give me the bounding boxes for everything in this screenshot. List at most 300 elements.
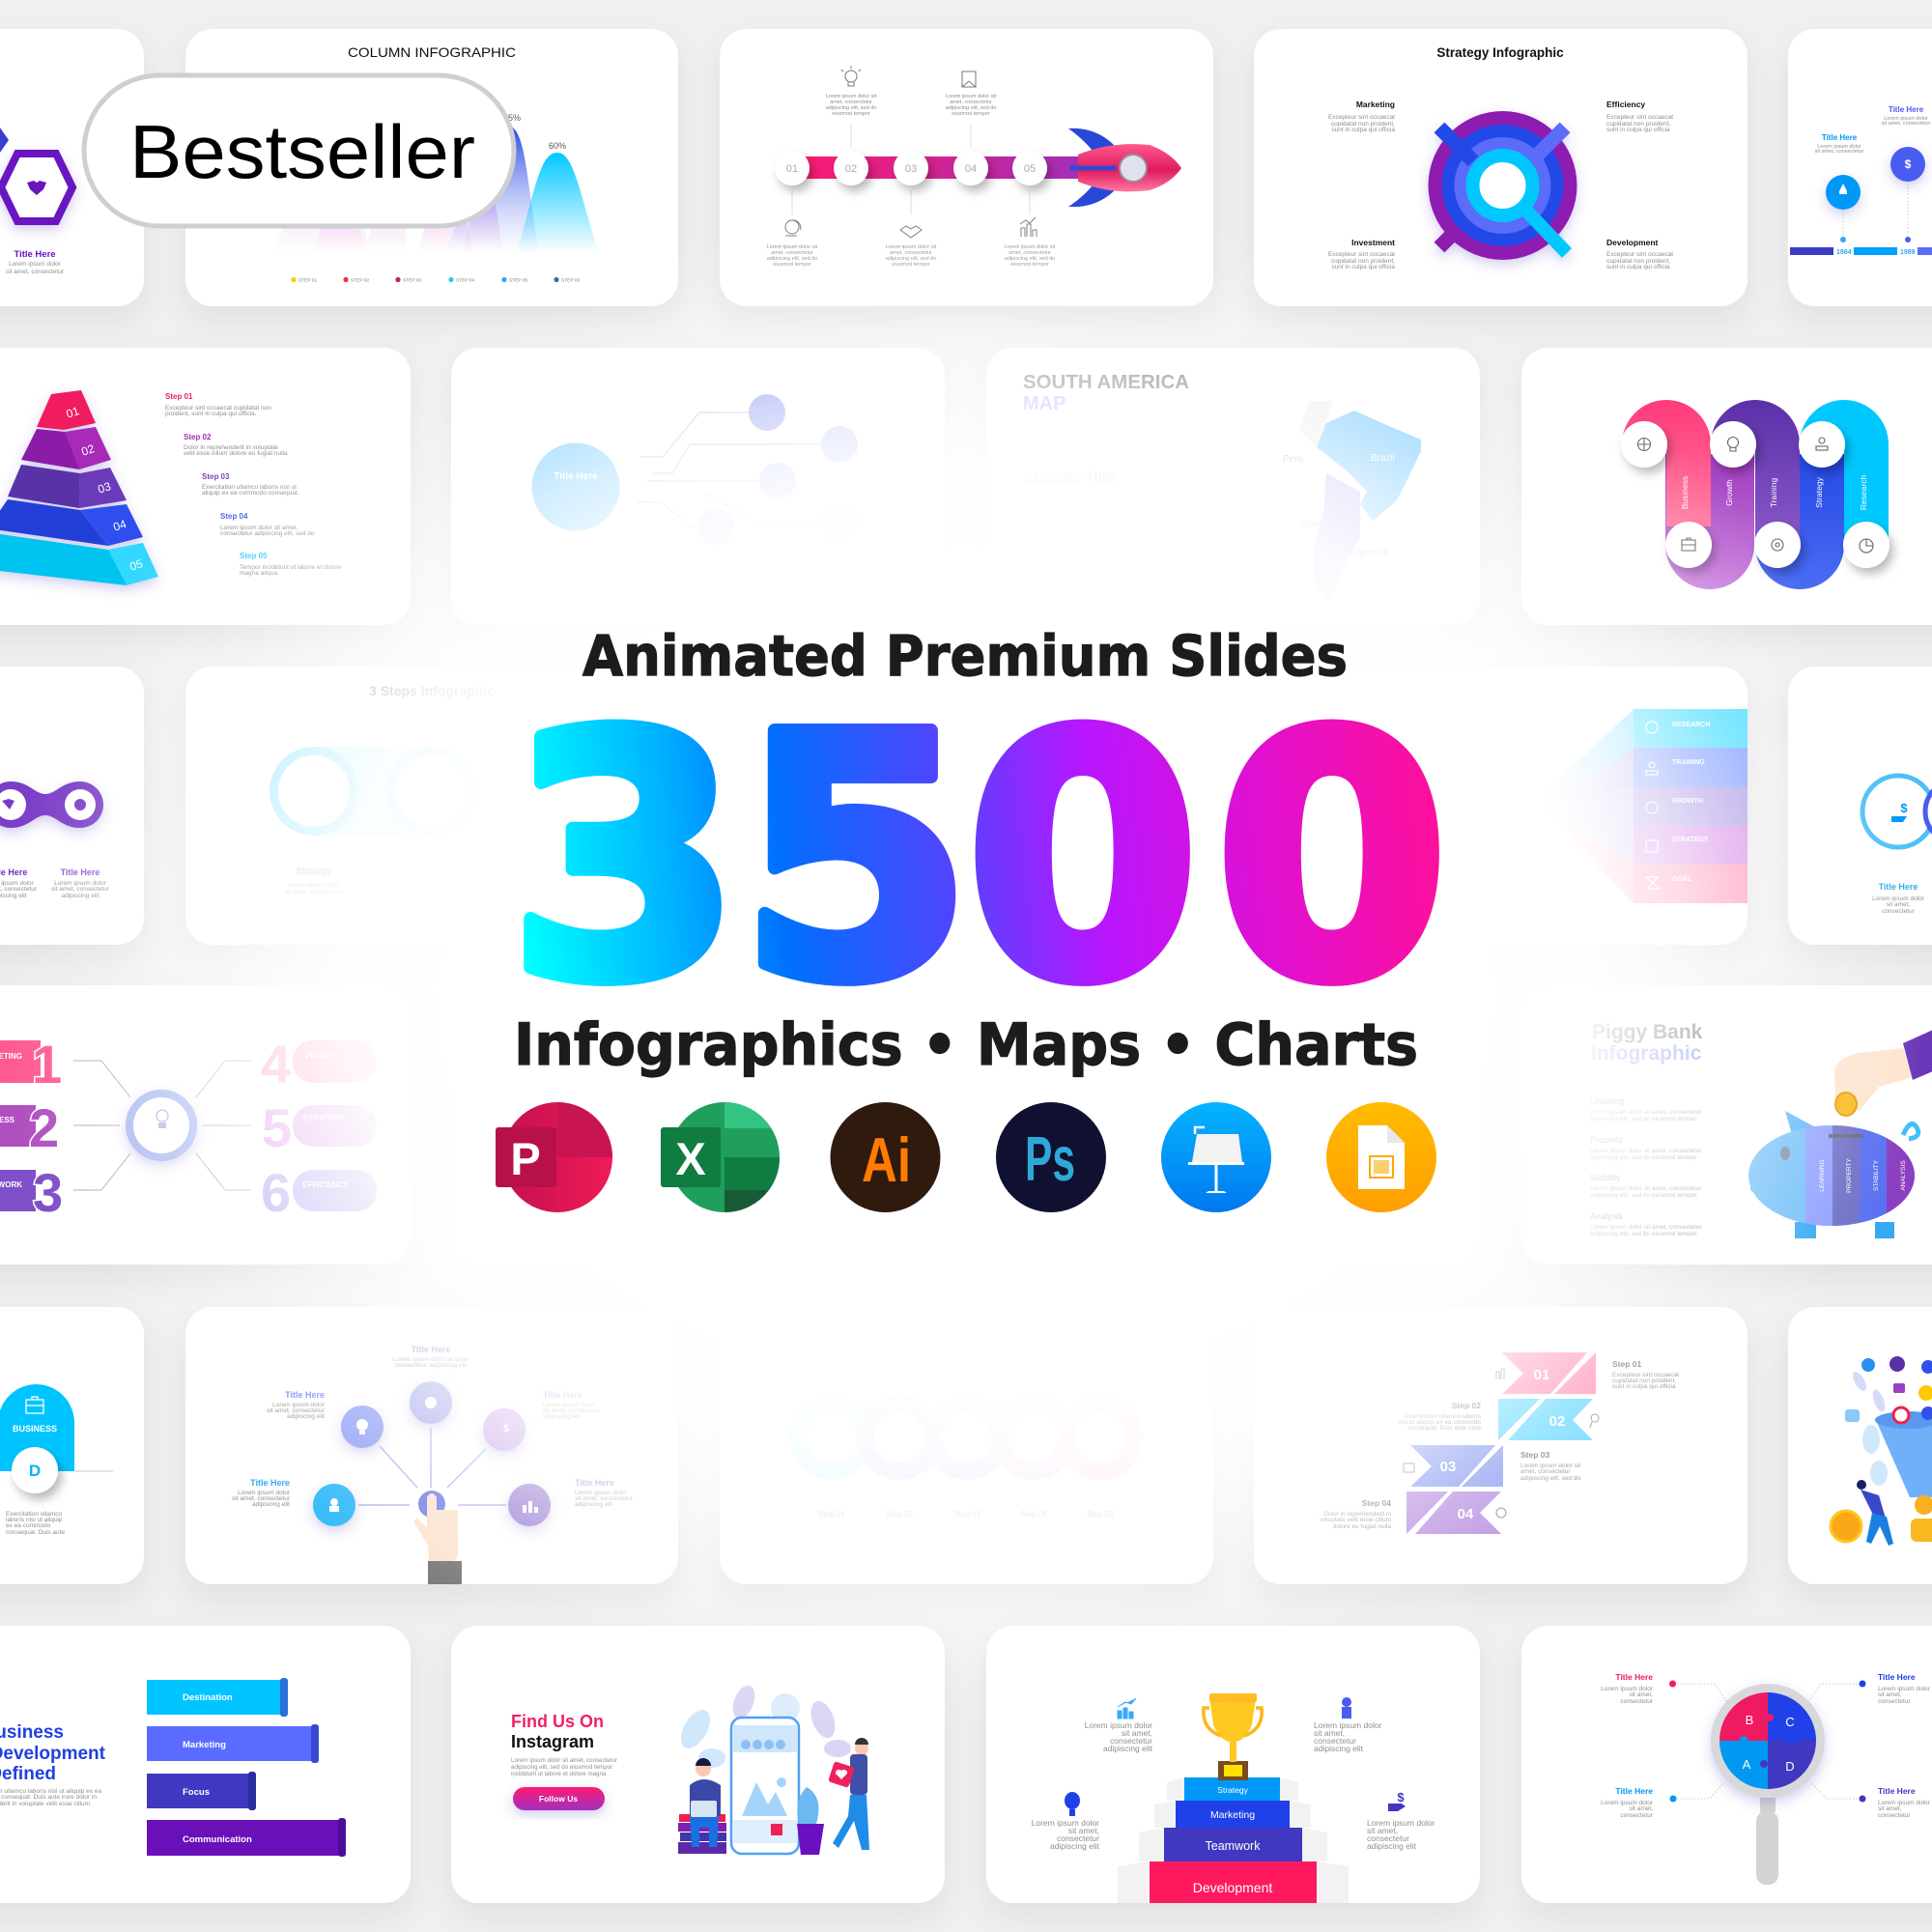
timeline markers: $ [1905,157,1912,171]
side captions [1032,1720,1435,1851]
hand [413,1493,462,1584]
button [513,1787,605,1810]
heading [511,1712,604,1751]
panel: strategy infographic [1254,29,1747,306]
list text [1590,1109,1702,1237]
step captions: Step 03 [953,1510,980,1519]
piggy labels: PROPERTY [1846,1158,1853,1193]
chevron numbers: 02 [1549,1413,1565,1430]
puzzle letters [1743,1713,1795,1774]
step captions: amet, consectetur [950,99,992,105]
pyramid [0,390,158,585]
ribbon: research [1800,400,1889,545]
button: Follow Us [539,1794,578,1804]
step captions: Step 04 [220,512,248,521]
hidden companion slide [986,985,1480,1264]
side captions: Lorem ipsum dolor [1367,1818,1435,1828]
icon: Excel [661,1102,780,1212]
stacked bands [1634,709,1747,903]
step numbers: 01 [65,404,81,421]
step captions: adipiscing elit, sed do [886,256,936,262]
band labels [1672,722,1710,883]
node captions: adipiscing elit [543,1413,581,1420]
step captions: Step 05 [240,552,268,560]
magnifier rim [1711,1684,1825,1798]
node captions: sit amet, consectetur [575,1495,634,1502]
panel: hexagon slide [0,29,144,306]
body text: Lorem ipsum dolor sit amet, consectetur [511,1757,617,1764]
step captions: Dolor in reprehenderit in [1323,1511,1391,1518]
callouts: consectetur [1878,1812,1911,1819]
caption: sit amet, [1887,901,1910,908]
chain graphic [0,781,103,828]
side captions: Lorem ipsum dolor [1032,1818,1099,1828]
quadrant labels: sunt in culpa qui officia [1331,264,1395,270]
piggy illustration [1748,1111,1918,1238]
heading: Strategy Infographic [1436,45,1564,60]
magnifier handle [1756,1797,1778,1885]
timeline bar [792,156,1111,179]
quadrant labels: Excepteur sint occaecat [1328,114,1395,121]
value labels: 60% [549,141,566,151]
node captions: Lorem ipsum dolor [238,1490,291,1496]
panel: five rings [720,1307,1213,1584]
step captions: eiusmod tempor [773,262,811,268]
ribbon labels: Research [1859,475,1868,510]
chevrons [1406,1352,1596,1534]
quadrant labels: cupidatat non proident, [1331,121,1395,128]
callouts: consectetur [1620,1698,1654,1705]
legend: STEP 04 [456,278,474,284]
step captions: Lorem ipsum dolor sit [1005,244,1056,250]
map labels: Argentina [1348,548,1389,558]
step captions: aliquip ex ea commodo consequat. [202,490,299,497]
puzzle letters: C [1785,1715,1795,1729]
step captions: velit esse cillum dolore eu fugiat nulla [184,450,288,457]
step captions: Step 04 [1362,1498,1391,1508]
icon: handshake [27,181,46,195]
icon: Google Slides [1326,1102,1436,1212]
list: Analysis [1590,1211,1623,1221]
panel: wave ribbons [1521,348,1932,625]
illustration: standing man [828,1738,869,1850]
timeline nodes: 01 [786,163,798,175]
value labels [503,113,566,151]
slide caption: Title Here [14,249,56,260]
panel: megaphone [1788,1307,1932,1584]
list text: adipiscing elit, sed do eiusmod tempor [1590,1116,1697,1122]
step captions: eiusmod tempor [832,111,870,117]
left bands [0,1040,41,1211]
chevron numbers: 03 [1440,1459,1456,1475]
step captions: Step 01 [818,1510,845,1519]
callouts: Lorem ipsum dolor [1601,1686,1654,1692]
callouts [1601,1672,1931,1819]
piggy labels: LEARNING [1819,1159,1826,1192]
step captions: adipiscing elit, sed do [826,105,876,111]
fan bottom [1546,811,1634,903]
timeline bars [1790,247,1932,256]
side captions: consectetur [1314,1736,1356,1746]
grey stairs [1118,1777,1349,1903]
list text: adipiscing elit, sed do eiusmod tempor [1590,1192,1697,1199]
list text: adipiscing elit, sed do eiusmod tempor [1590,1154,1697,1161]
timeline bars: 1989 [1900,249,1916,256]
hub circle [531,442,620,531]
captions: sit amet, consectetur [1882,121,1931,127]
nodes [697,394,858,545]
target graphic [1428,111,1577,260]
linked rings [274,747,471,836]
quadrant labels: Excepteur sint occaecat [1328,251,1395,258]
captions: Title Here [1889,105,1924,114]
step captions: Lorem ipsum dolor sit [946,94,997,99]
panel: trophy steps [986,1626,1480,1903]
heading: MAP [1023,393,1065,414]
icon: Excel: X [675,1133,706,1184]
node captions: Lorem ipsum dolor [575,1490,628,1496]
node captions: consectetur adipiscing elit [395,1362,467,1369]
side captions: sit amet, [1314,1728,1345,1738]
panel: ring slide [1788,667,1932,945]
leaves [1850,1370,1888,1486]
heading [1591,1021,1703,1065]
step captions: eiusmod tempor [1010,262,1049,268]
node captions: Lorem ipsum dolor sit amet [393,1356,469,1363]
captions: sit amet, consectetur [1815,149,1864,155]
coin and hand [1834,1026,1932,1116]
slide caption: Lorem ipsum dolor [9,261,62,268]
side captions: sit amet, [1068,1826,1099,1835]
puzzle letters: D [1785,1759,1795,1774]
panel: piggy bank [1590,985,1932,1277]
caption [1872,882,1925,915]
trophy [1204,1693,1262,1780]
band icons [1646,722,1660,889]
map labels [1283,453,1395,558]
node captions: adipiscing elit [287,1413,325,1420]
stair labels: Development [1193,1880,1272,1895]
node captions: sit amet, consectetur [267,1407,326,1414]
side captions: consectetur [1057,1833,1099,1843]
letter ball: D [29,1462,41,1480]
ribbon: growth [1665,454,1754,589]
ribbon labels: Marketing [183,1740,226,1750]
step captions: consequat. Duis aute irure [1407,1425,1481,1432]
panel: timeline slide [1788,29,1932,306]
chevron numbers: 01 [1534,1367,1549,1383]
coins [1831,1495,1932,1542]
callouts: Lorem ipsum dolor [1878,1686,1931,1692]
panel: dumbbell slide [0,667,144,945]
fan lower middle [1546,787,1634,865]
step captions: adipiscing elit, sed do [767,256,817,262]
legend: STEP 01 [298,278,317,284]
panel: 3 steps infographic [185,667,678,945]
step captions: Lorem ipsum dolor sit [767,244,818,250]
ribbon labels: Strategy [1814,476,1824,508]
node captions: sit amet, consectetur [232,1495,291,1502]
band labels: TRAINING [1672,759,1705,766]
right labels [302,1052,349,1189]
captions: Title Here [61,867,99,877]
panel: business development [0,1626,411,1903]
caption: Title Here [1879,882,1918,892]
callouts: sit amet, [1629,1805,1653,1812]
node captions: sit amet, consectetur [543,1407,602,1414]
left labels [0,1052,22,1189]
list: Learning [1590,1096,1624,1106]
statistic title: Statistic Title [1023,469,1115,487]
body text: incididunt ut labore et dolore magna [511,1771,607,1777]
step captions: Lorem ipsum dolor sit [886,244,937,250]
icons [1065,1697,1406,1816]
step captions [818,1510,1114,1519]
step captions: proident, sunt in culpa qui officia. [165,411,257,417]
step numbers: 02 [79,441,97,459]
decorative connectors [792,124,1030,214]
piggy labels [1819,1158,1907,1193]
slide caption [6,249,65,275]
step captions: voluptate velit esse cillum [1320,1517,1391,1523]
side captions: adipiscing elit [1367,1841,1417,1851]
node icons [329,1397,538,1513]
side captions: sit amet, [1122,1728,1152,1738]
quadrant labels: Excepteur sint occaecat [1606,114,1673,121]
step captions: Step 02 [886,1510,913,1519]
panel: hidden centre slide [720,667,1213,945]
icon: Illustrator [831,1102,941,1212]
step captions: nisi ut aliquip ex ea commodo [1398,1419,1481,1426]
side captions: adipiscing elit [1050,1841,1100,1851]
step captions: Step 04 [1020,1510,1047,1519]
legend: STEP 06 [561,278,580,284]
callouts: sit amet, [1878,1691,1902,1698]
node captions: Lorem ipsum dolor [272,1402,326,1408]
step captions: adipiscing elit, sed do [1520,1475,1581,1482]
step captions: dolore eu fugiat nulla [1333,1523,1391,1530]
heading: 3 Steps Infographic [369,683,495,698]
timeline nodes: 03 [905,163,917,175]
body text [6,1511,65,1536]
chevron icons [1404,1369,1599,1518]
ribbon labels: Destination [183,1692,233,1703]
icon: briefcase [26,1397,43,1413]
person [1857,1480,1893,1546]
ribbon labels: Training [1769,478,1778,507]
step captions: cupidatat non proident, [1612,1378,1676,1384]
band labels: GOAL [1672,876,1692,883]
left numerals: 1 [32,1034,62,1094]
piggy labels: ANALYSIS [1900,1160,1907,1191]
step captions: Step 03 [202,472,230,481]
quadrant labels: Development [1606,238,1659,247]
step captions: Lorem ipsum dolor sit [826,94,877,99]
node captions: Title Here [575,1478,614,1488]
slide caption: sit amet, consectetur [6,269,65,275]
illustration: phone [731,1718,799,1854]
legend [291,277,580,284]
right labels: STRATEGY [303,1114,346,1122]
puzzle letters: B [1746,1713,1753,1727]
quadrant labels: Marketing [1356,99,1395,109]
caption: Strategy [296,867,332,877]
ring [1862,776,1932,847]
right numerals [261,1034,292,1223]
left numerals: 2 [29,1097,59,1158]
step captions [1320,1359,1679,1530]
callouts: sit amet, [1629,1691,1653,1698]
captions: Lorem ipsum dolor [1817,144,1861,150]
dotted connectors [1677,1684,1858,1799]
panel: funnel bands [1254,667,1747,945]
step captions: amet, consectetur [890,250,932,256]
step numbers: 03 [96,479,113,497]
step captions: magna aliqua. [240,570,279,577]
ribbon nodes [1621,421,1889,568]
step captions: Step 01 [165,392,193,401]
step captions: Lorem ipsum dolor sit [1520,1463,1580,1469]
subtitle: Infographics • Maps • Charts [514,1011,1418,1079]
caption: Lorem ipsum dolor [1872,895,1925,902]
ribbon: strategy [1755,454,1844,589]
illustration: plants [675,1683,851,1768]
timeline bars: 1984 [1836,249,1852,256]
captions: Lorem ipsum dolor [1884,116,1928,122]
node captions: Title Here [543,1390,582,1400]
node captions: adipiscing elit [575,1501,612,1508]
legend: STEP 02 [351,278,369,284]
step captions: sunt in culpa qui officia [1612,1383,1676,1390]
ribbons [147,1678,346,1857]
callouts: consectetur [1620,1812,1654,1819]
callouts: Title Here [1878,1786,1916,1796]
step captions: Step 01 [1612,1359,1642,1369]
centre node [418,1491,445,1518]
node captions [232,1345,634,1508]
body text: consequat. Duis aute [6,1529,65,1536]
right pills [293,1040,377,1211]
fan top [1546,709,1634,800]
side captions: consectetur [1110,1736,1152,1746]
puzzle letters: A [1743,1757,1751,1772]
heading: COLUMN INFOGRAPHIC [348,44,516,60]
step captions: consectetur adipiscing elit, sed do [220,530,315,537]
ribbon: training [1711,400,1800,545]
node captions: Lorem ipsum dolor [543,1402,596,1408]
step captions [767,94,1056,268]
icon: Photoshop [996,1102,1106,1212]
node captions: adipiscing elit [252,1501,290,1508]
left numerals [29,1034,63,1223]
panel: south america map [986,348,1480,625]
node icons: $ [503,1424,509,1435]
body text: Exercitation ullamco [6,1511,63,1518]
megaphone [1875,1411,1932,1497]
step captions: amet, consectetur [830,99,872,105]
social icons [1845,1356,1932,1423]
icon: blue hexagon [0,121,9,159]
timeline nodes: 04 [965,163,977,175]
step captions: Step 02 [1452,1401,1481,1410]
panel: rocket timeline [720,29,1213,306]
icon: purple hexagon [1,154,72,221]
icon: hand with dollar [1891,801,1908,822]
timeline markers [1826,147,1925,242]
step captions: Lorem ipsum dolor sit amet, [220,525,298,531]
step captions: Dolor in reprehenderit in voluptate [184,444,278,451]
chain icons [2,799,86,810]
callouts: Lorem ipsum dolor [1878,1800,1931,1806]
callouts: consectetur [1878,1698,1911,1705]
heading: Instagram [511,1732,594,1751]
step numbers [65,404,145,574]
right labels: PROFIT [305,1052,333,1061]
icon: Keynote [1161,1102,1271,1212]
list [1590,1096,1624,1221]
captions [0,867,110,899]
rings [798,1404,1134,1471]
caption: consectetur [1882,908,1916,915]
step captions: Excepteur sint occaecat cupidatat non [165,405,271,412]
stair labels: Marketing [1210,1809,1255,1821]
ribbon labels: Focus [183,1787,210,1798]
puzzle lens [1719,1692,1816,1789]
stair labels [1193,1785,1272,1895]
node icons [1638,437,1873,553]
letter ball [12,1447,58,1493]
captions [1815,105,1931,155]
icons: $ [1397,1790,1405,1804]
panel: business arch [0,1307,144,1584]
step numbers: 05 [128,556,145,574]
stair labels: Teamwork [1206,1839,1261,1853]
step captions [165,392,342,577]
captions: Title Here [1822,133,1858,142]
panel: 3D pyramid [0,348,411,625]
step numbers: 04 [111,517,128,534]
callouts: Title Here [1615,1672,1653,1682]
timeline nodes: 05 [1024,163,1036,175]
icon: PowerPoint [496,1102,612,1212]
value labels: 55% [503,113,521,123]
bestseller badge [84,75,514,226]
timeline nodes: 02 [845,163,857,175]
quadrant labels: Excepteur sint occaecat [1606,251,1673,258]
bestseller badge: Bestseller [129,109,475,194]
list text: Lorem ipsum dolor sit amet, consectetur [1590,1185,1702,1192]
panel: chevron steps [1254,1307,1747,1584]
rocket [1068,128,1181,207]
step captions: Step 05 [1087,1510,1114,1519]
heading: Find Us On [511,1712,604,1731]
ribbon labels: Business [1680,476,1690,509]
map [1299,401,1421,602]
side captions: Lorem ipsum dolor [1085,1720,1152,1730]
icon: Illustrator: Ai [862,1124,911,1195]
body text [511,1757,617,1777]
heading: SOUTH AMERICA [1023,372,1189,393]
right numerals: 6 [261,1162,291,1223]
quadrant labels: sunt in culpa qui officia [1606,264,1670,270]
quadrant labels: Efficiency [1606,99,1645,109]
quadrant labels [1328,99,1673,270]
step captions: amet, consectetur [771,250,813,256]
side captions: consectetur [1367,1833,1409,1843]
band labels: STRATEGY [1672,837,1709,843]
captions: adipiscing elit [61,893,99,899]
node captions: Title Here [285,1390,325,1400]
